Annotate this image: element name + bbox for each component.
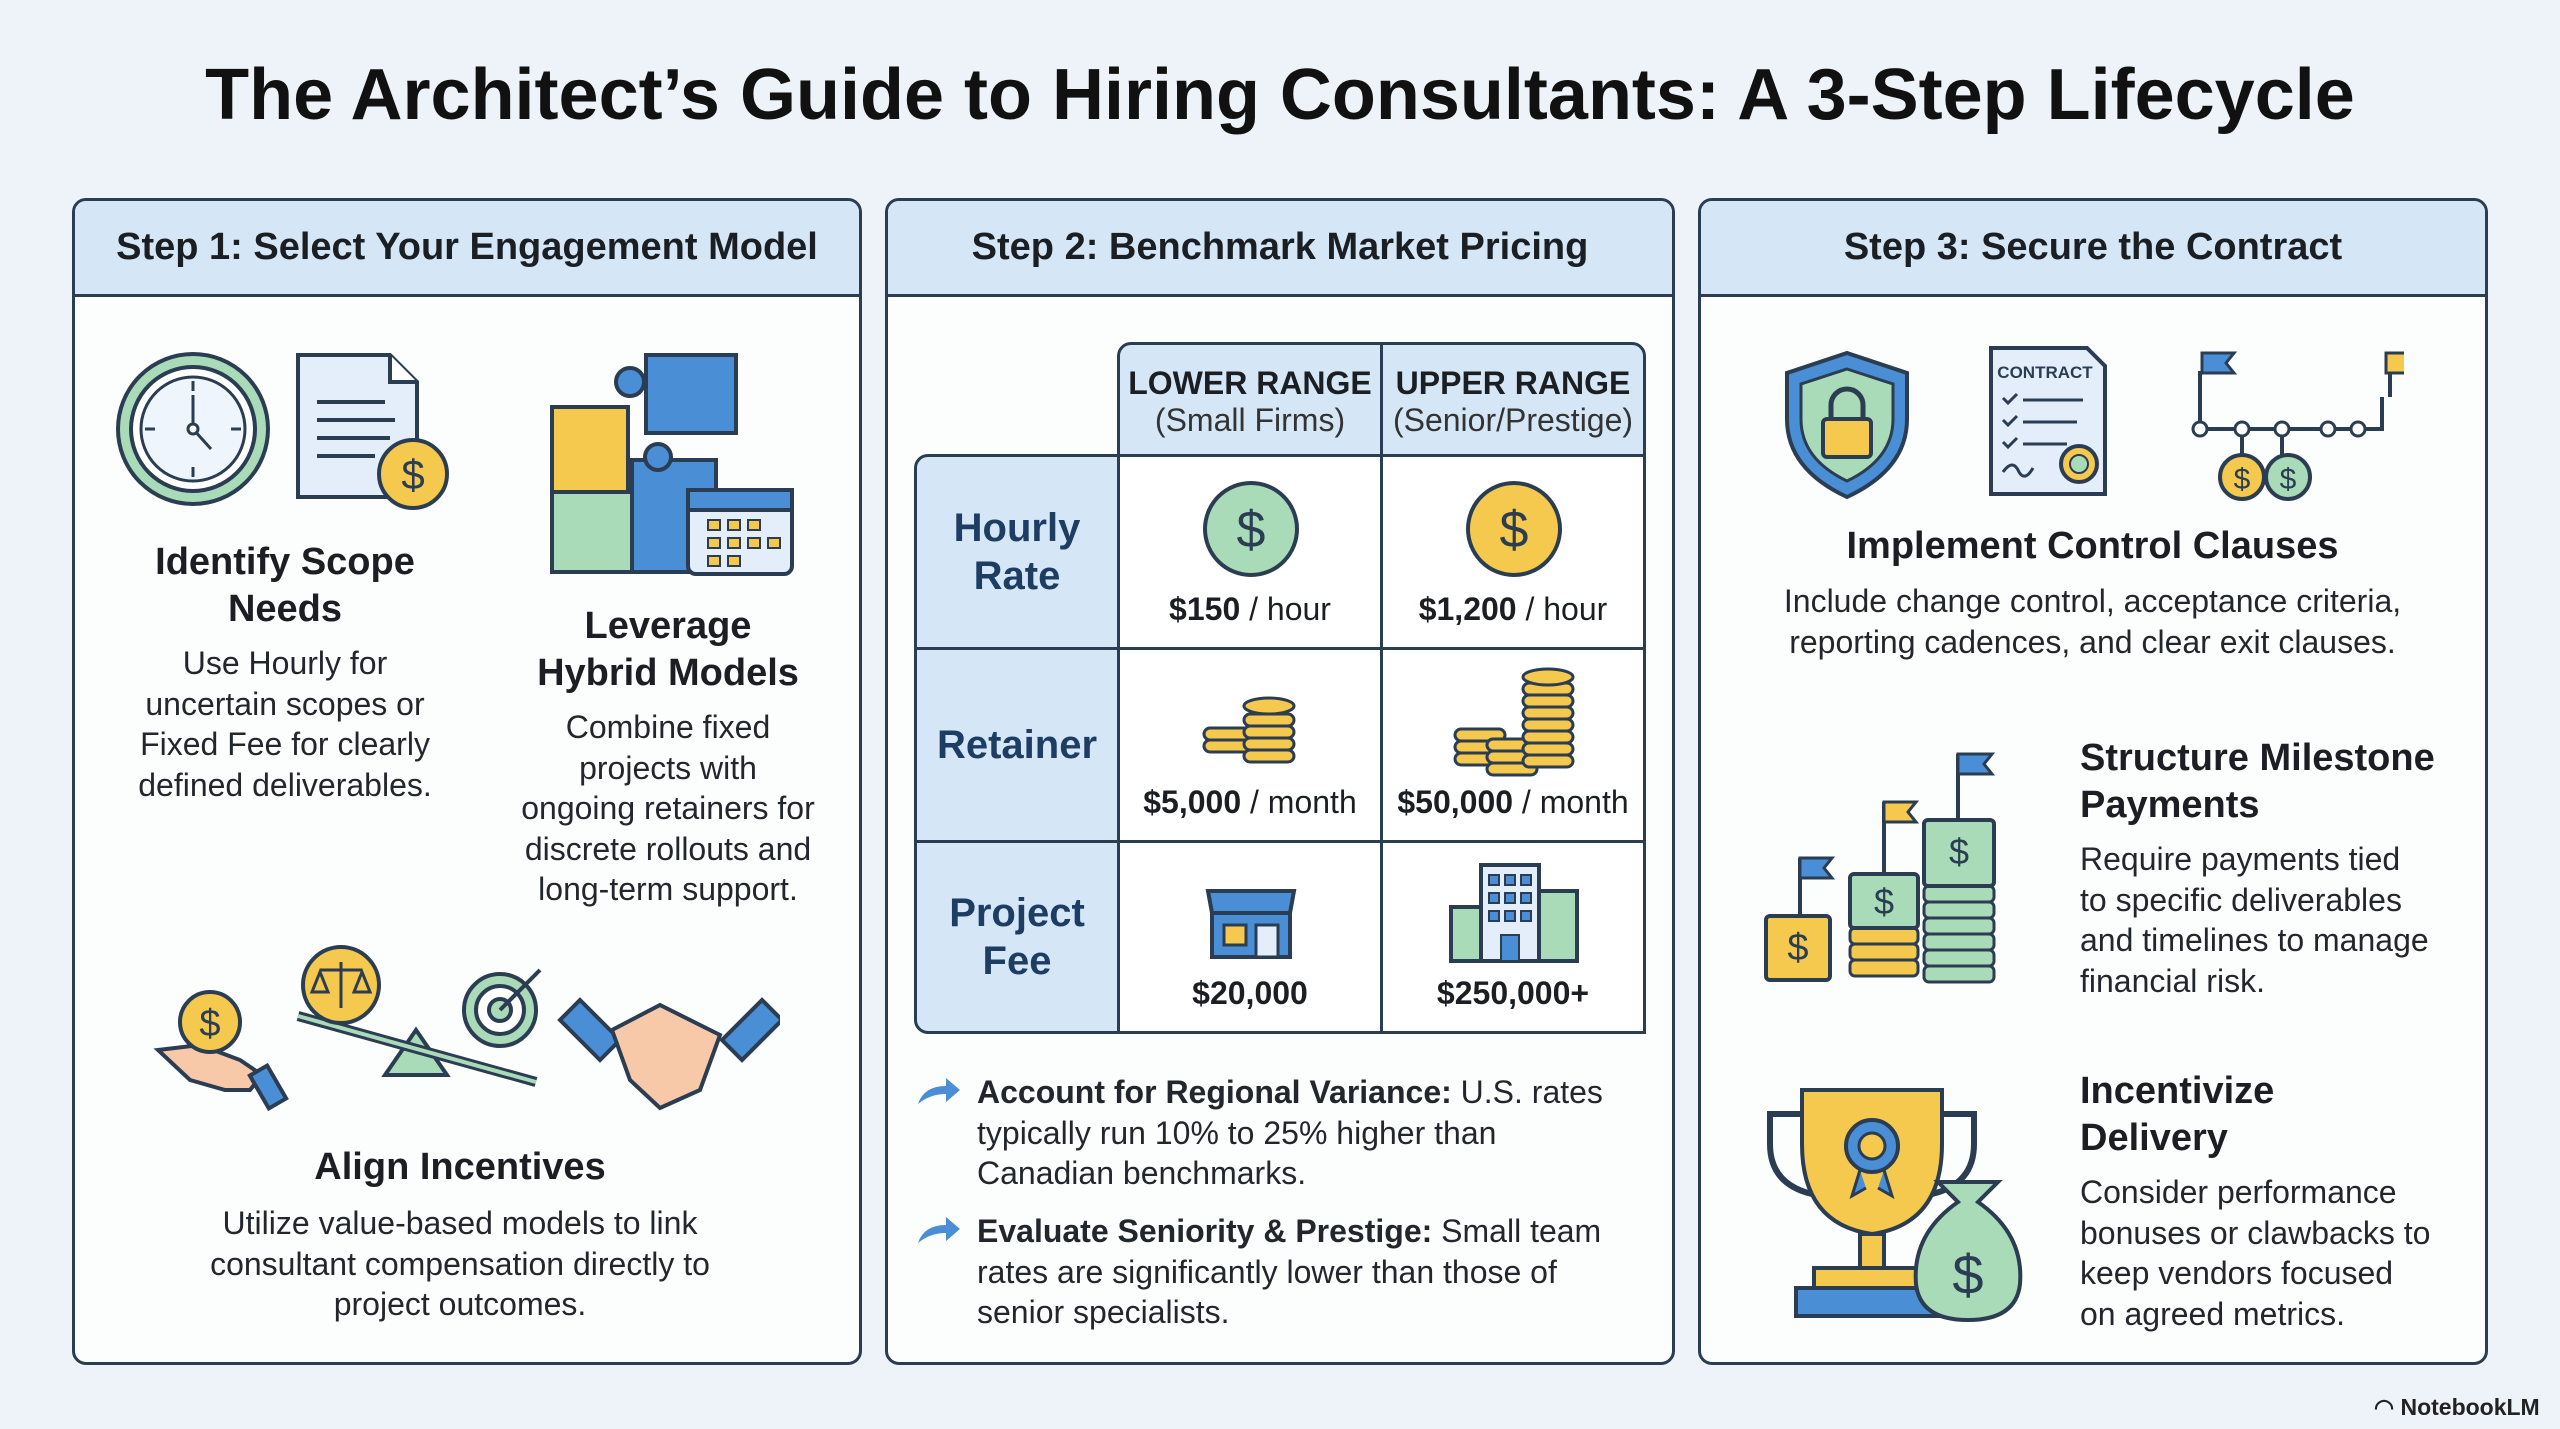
text: seniority bbox=[977, 1213, 1601, 1330]
table header: upper range: UPPER RANGE bbox=[1396, 365, 1630, 401]
text: hybrid models: Combine fixed bbox=[566, 709, 770, 745]
heading: align incentives: Align Incentives bbox=[314, 1146, 606, 1188]
text: milestone payments bbox=[2080, 841, 2429, 998]
panel: step 1 bbox=[72, 198, 862, 1365]
text: align incentives: project outcomes. bbox=[334, 1286, 586, 1322]
row label: hourly rate: Hourly bbox=[954, 506, 1080, 550]
icon: milestone flow: $ bbox=[2280, 463, 2297, 496]
cell: retainer upper: $50,000 / month bbox=[1397, 784, 1629, 820]
icon: milestone payments: $ bbox=[1949, 831, 1969, 872]
icon: milestone flow bbox=[2192, 352, 2404, 501]
text: control clauses: reporting cadences, and clear exit clauses. bbox=[1789, 624, 2396, 660]
heading: structure milestone payments: Payments bbox=[2080, 784, 2260, 826]
heading: incentivize delivery: Incentivize bbox=[2080, 1070, 2274, 1112]
text: hybrid models bbox=[521, 709, 815, 907]
header: step 1 bbox=[75, 201, 859, 297]
text: hybrid models: ongoing retainers for bbox=[521, 790, 815, 826]
text: seniority: Evaluate Seniority & Prestige: Small team bbox=[977, 1213, 1601, 1249]
cell: project upper: $250,000+ bbox=[1437, 975, 1589, 1011]
text: regional variance: Account for Regional Variance: U.S. rates bbox=[977, 1074, 1603, 1110]
text: regional variance bbox=[977, 1074, 1603, 1191]
icon: puzzle with calendar bbox=[550, 353, 794, 576]
cell: project lower: $20,000 bbox=[1192, 975, 1308, 1011]
text: hybrid models: discrete rollouts and bbox=[525, 830, 811, 866]
text: identify scope: Fixed Fee for clearly bbox=[140, 726, 430, 762]
heading: structure milestone payments bbox=[2080, 737, 2435, 826]
text: hybrid models: long-term support. bbox=[538, 871, 798, 907]
icon: trophy with money bag: $ bbox=[1952, 1243, 1984, 1306]
cell: hourly lower: $ bbox=[1237, 501, 1266, 559]
text: control clauses: Include change control, acceptance criteria, bbox=[1784, 583, 2401, 619]
heading: leverage hybrid models bbox=[537, 605, 799, 694]
icon: contract bbox=[1989, 346, 2107, 496]
text: milestone payments: and timelines to manage bbox=[2080, 922, 2429, 958]
heading: structure milestone payments: Structure Milestone bbox=[2080, 737, 2435, 779]
icon: arrow 2 bbox=[918, 1217, 960, 1243]
cell: retainer lower bbox=[1117, 647, 1383, 843]
cell: hourly lower: $150 / hour bbox=[1169, 591, 1331, 627]
text: identify scope bbox=[138, 645, 432, 802]
icon: shield bbox=[1785, 350, 1909, 500]
panel: step 2 bbox=[885, 198, 1675, 1365]
heading: leverage hybrid models: Leverage bbox=[585, 605, 751, 647]
table header: lower range: (Small Firms) bbox=[1155, 402, 1345, 438]
text: hybrid models: projects with bbox=[579, 750, 757, 786]
icon: clock bbox=[116, 352, 270, 506]
heading: identify scope needs bbox=[155, 541, 415, 630]
heading: incentivize delivery: Delivery bbox=[2080, 1117, 2228, 1159]
row label: hourly rate: Rate bbox=[974, 554, 1060, 598]
cell: retainer upper bbox=[1380, 647, 1646, 843]
text: align incentives bbox=[210, 1205, 710, 1322]
icon: milestone payments bbox=[1764, 752, 1996, 984]
header: step 3 bbox=[1701, 201, 2485, 297]
icon: milestone payments: $ bbox=[1787, 927, 1809, 969]
row label: project fee bbox=[914, 840, 1120, 1034]
cell: hourly upper: $1,200 / hour bbox=[1419, 591, 1607, 627]
row label: project fee: Project bbox=[949, 891, 1085, 935]
table header: lower range: LOWER RANGE bbox=[1128, 365, 1372, 401]
cell: hourly upper bbox=[1380, 454, 1646, 650]
text: milestone payments: to specific deliverables bbox=[2080, 882, 2402, 918]
text: regional variance: typically run 10% to 25% higher than bbox=[977, 1114, 1496, 1150]
heading: identify scope needs: Identify Scope bbox=[155, 541, 415, 583]
icon: trophy with money bag bbox=[1767, 1088, 2022, 1322]
icon: align incentives group bbox=[154, 945, 780, 1112]
header: step 2: Step 2: Benchmark Market Pricing bbox=[972, 226, 1588, 268]
text: incentivize delivery: Consider performance bbox=[2080, 1174, 2397, 1210]
text: identify scope: defined deliverables. bbox=[138, 766, 432, 802]
header: step 3: Step 3: Secure the Contract bbox=[1844, 226, 2342, 268]
heading: implement control clauses: Implement Control Clauses bbox=[1846, 525, 2338, 567]
icon: contract: CONTRACT bbox=[1997, 363, 2093, 382]
text: incentivize delivery: on agreed metrics. bbox=[2080, 1296, 2345, 1332]
heading: identify scope needs: Needs bbox=[228, 588, 342, 630]
text: milestone payments: Require payments tied bbox=[2080, 841, 2400, 877]
table: pricing benchmarks bbox=[914, 342, 1646, 1034]
text: milestone payments: financial risk. bbox=[2080, 962, 2265, 998]
header: step 2 bbox=[888, 201, 1672, 297]
cell: hourly upper: $ bbox=[1500, 501, 1529, 559]
icon: milestone payments: $ bbox=[1874, 881, 1894, 922]
table header: upper range: (Senior/Prestige) bbox=[1393, 402, 1633, 438]
icon: align incentives group: $ bbox=[199, 1003, 221, 1045]
text: seniority: senior specialists. bbox=[977, 1294, 1230, 1330]
table header: upper range bbox=[1380, 342, 1646, 457]
text: regional variance: Canadian benchmarks. bbox=[977, 1155, 1306, 1191]
text: align incentives: Utilize value-based models to link bbox=[223, 1205, 697, 1241]
cell: hourly lower bbox=[1117, 454, 1383, 650]
icon: arrow 1 bbox=[918, 1078, 960, 1104]
icon: milestone flow: $ bbox=[2234, 463, 2251, 496]
text: identify scope: uncertain scopes or bbox=[145, 686, 425, 722]
text: incentivize delivery bbox=[2080, 1174, 2430, 1332]
icon: document with coin: $ bbox=[401, 451, 425, 498]
panel: step 3 bbox=[1698, 198, 2488, 1365]
title: The Architect’s Guide to Hiring Consultants: A 3-Step Lifecycle bbox=[205, 55, 2355, 135]
cell: project upper bbox=[1380, 840, 1646, 1034]
footer: NotebookLM mark: ◠ NotebookLM bbox=[2374, 1394, 2540, 1420]
text: incentivize delivery: keep vendors focused bbox=[2080, 1255, 2393, 1291]
cell: retainer lower: $5,000 / month bbox=[1143, 784, 1357, 820]
table header: lower range bbox=[1117, 342, 1383, 457]
heading: incentivize delivery bbox=[2080, 1070, 2274, 1159]
text: control clauses bbox=[1784, 583, 2401, 660]
text: incentivize delivery: bonuses or clawbacks to bbox=[2080, 1214, 2430, 1250]
text: seniority: rates are significantly lower than those of bbox=[977, 1254, 1557, 1290]
row label: project fee: Fee bbox=[983, 939, 1051, 983]
row label: retainer: Retainer bbox=[937, 723, 1097, 767]
heading: leverage hybrid models: Hybrid Models bbox=[537, 652, 799, 694]
row label: hourly rate bbox=[914, 454, 1120, 650]
cell: project lower bbox=[1117, 840, 1383, 1034]
header: step 1: Step 1: Select Your Engagement Model bbox=[116, 226, 818, 268]
text: align incentives: consultant compensation directly to bbox=[210, 1246, 710, 1282]
text: identify scope: Use Hourly for bbox=[183, 645, 387, 681]
row label: retainer bbox=[914, 647, 1120, 843]
icon: document with coin bbox=[296, 353, 449, 510]
